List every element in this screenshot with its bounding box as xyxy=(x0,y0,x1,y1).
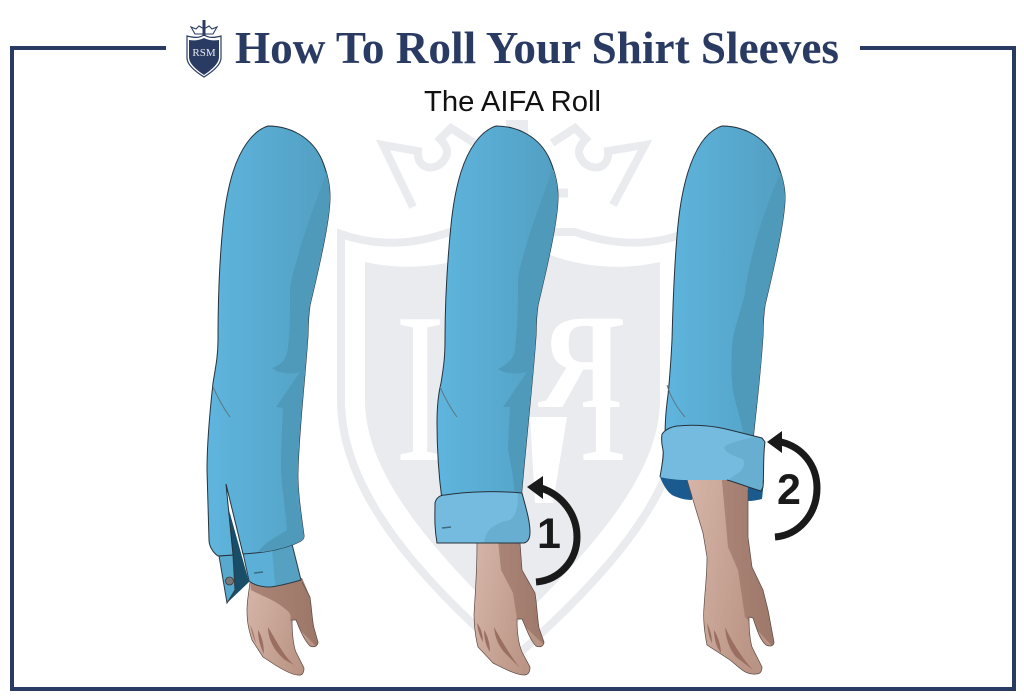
title: How To Roll Your Shirt Sleeves xyxy=(235,22,839,73)
buttonhole xyxy=(442,527,451,528)
watermark shield outline xyxy=(341,232,683,660)
cuff 2 xyxy=(435,490,535,545)
sleeve 2 xyxy=(437,126,570,500)
sleeve 1 xyxy=(207,126,340,560)
logo: crest xyxy=(187,20,221,77)
figure 2: first fold xyxy=(435,126,577,675)
figure 3: second fold xyxy=(660,126,817,674)
step number 2: 2 xyxy=(777,466,801,514)
cuff 1 left xyxy=(219,555,235,603)
step number 1: 1 xyxy=(537,510,561,558)
background watermark crest xyxy=(341,120,683,660)
sleeve 3 xyxy=(664,126,786,436)
subtitle: The AIFA Roll xyxy=(424,86,601,118)
watermark shield fill xyxy=(365,240,660,628)
watermark monogram: I xyxy=(578,270,628,508)
under-cuff lining xyxy=(660,470,764,501)
arrow 1 xyxy=(527,476,577,582)
buttonhole xyxy=(254,572,263,573)
figure 1: unrolled sleeve xyxy=(207,126,340,675)
watermark crown xyxy=(383,120,645,207)
watermark monogram: I xyxy=(395,270,445,508)
watermark monogram: R xyxy=(538,287,622,437)
logo: crest: RSM xyxy=(192,47,216,59)
placket opening xyxy=(227,510,249,603)
cuff 1 right xyxy=(242,545,302,588)
hand 2 xyxy=(474,544,544,676)
arrow 2 xyxy=(767,431,817,537)
button xyxy=(226,577,234,585)
cuff 3 xyxy=(660,425,770,495)
hand 1 xyxy=(246,578,318,676)
watermark monogram xyxy=(395,270,628,508)
forearm and hand 3 xyxy=(686,480,774,674)
